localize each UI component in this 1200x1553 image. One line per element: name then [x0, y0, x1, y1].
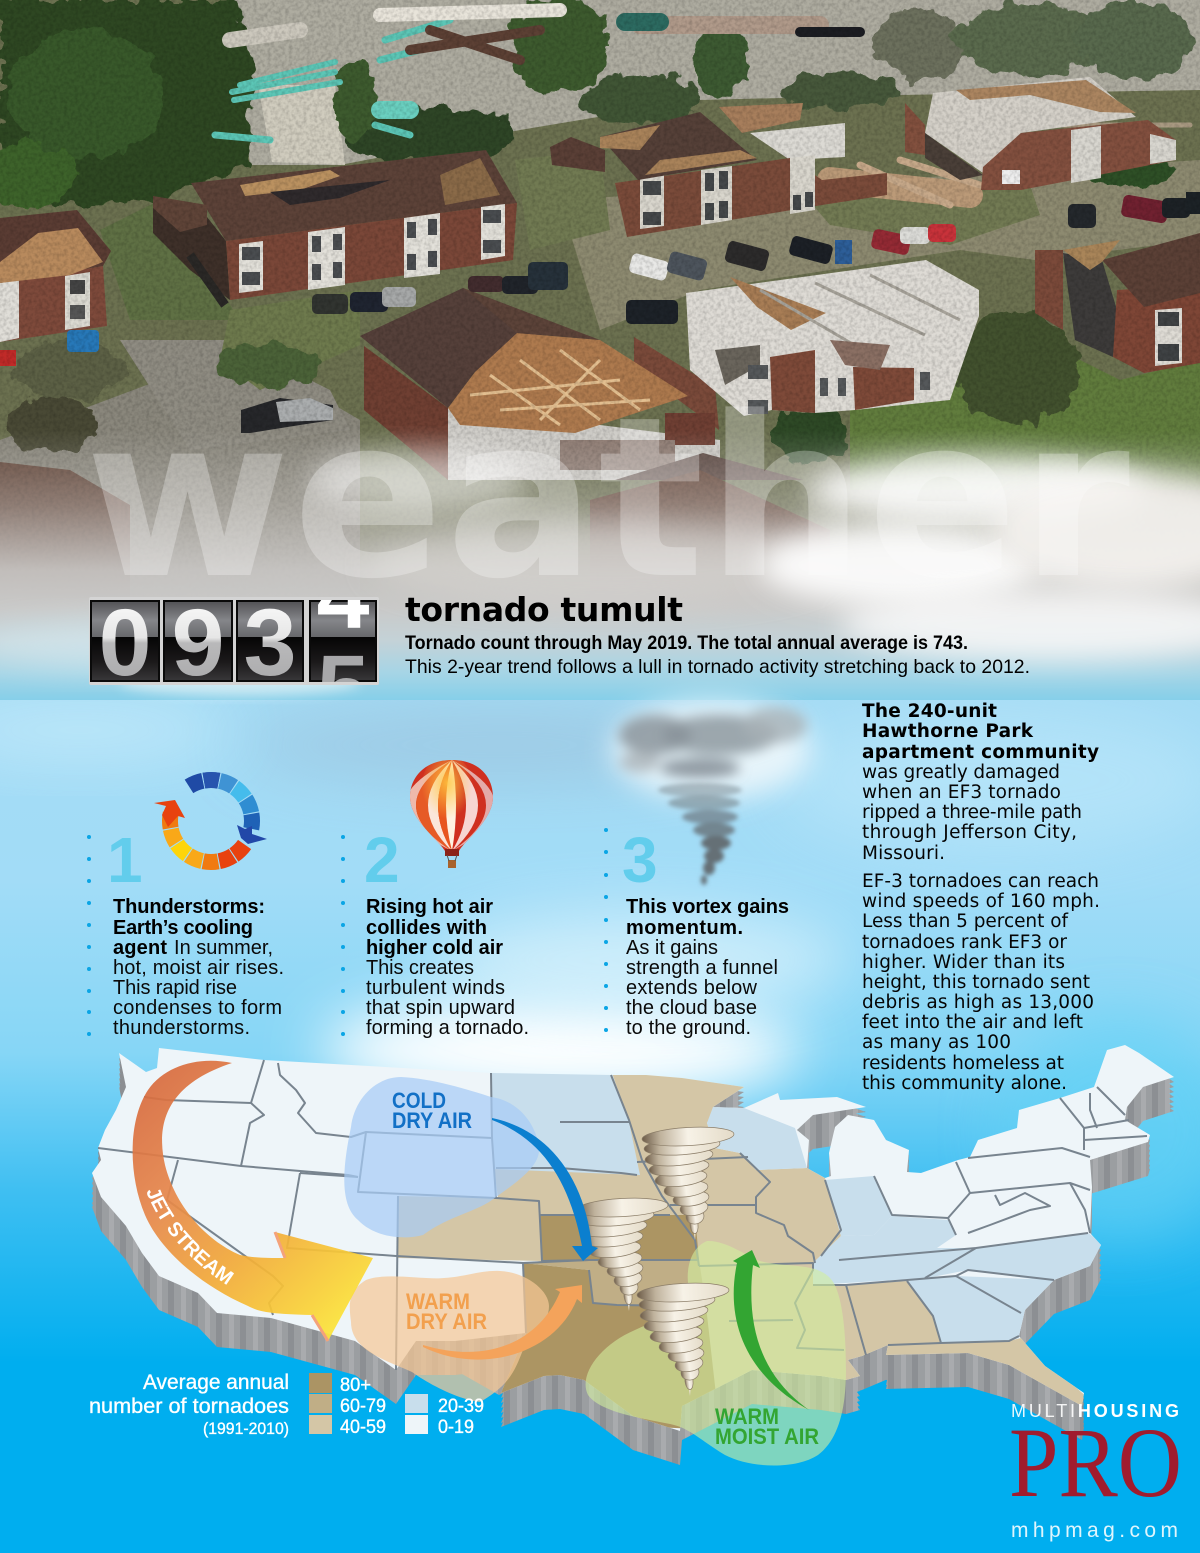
step 3 panel: [612, 700, 812, 1039]
legend values: 60-79: [340, 1396, 386, 1417]
counter digit rolling 4 to 5: [309, 600, 377, 682]
label: cold dry air: COLD: [392, 1088, 446, 1113]
logo url: mhpmag.com: [1011, 1519, 1178, 1542]
sidebar text: Hawthorne Park: was greatly damaged: [862, 762, 1060, 783]
step 2 panel: [364, 754, 529, 1039]
sidebar text: Hawthorne Park: tornadoes rank EF3 or: [862, 932, 1067, 953]
legend values: [340, 1375, 484, 1438]
step 3 text: to the ground.: [626, 1017, 751, 1039]
legend values: 40-59: [340, 1417, 386, 1438]
legend swatches: [309, 1373, 428, 1434]
step 1 text: In summer,: [174, 937, 273, 959]
dotted column rules: [87, 828, 608, 1036]
heading: tornado tumult: [405, 590, 683, 629]
state boundary lines: [98, 1060, 1147, 1370]
sidebar text: Hawthorne Park: EF-3 tornadoes can reach: [862, 871, 1099, 892]
arrow: jet stream: [132, 1060, 373, 1342]
arrow: warm air: [423, 1285, 582, 1360]
step 3 text: As it gains: [626, 937, 718, 959]
map base surface: [92, 1045, 1174, 1431]
sidebar text: Hawthorne Park: height, this tornado sent: [862, 972, 1090, 993]
step 3 text: the cloud base: [626, 997, 757, 1019]
label: warm moist air: [715, 1404, 819, 1449]
icon: circular temperature arrow: [154, 764, 268, 878]
building: left, torn roof: [0, 210, 111, 366]
step 1 text: thunderstorms.: [113, 1017, 250, 1039]
sidebar text: Hawthorne Park: feet into the air and left: [862, 1012, 1083, 1033]
step number 2: 2: [364, 824, 400, 896]
step 2 text: higher cold air: [366, 937, 503, 959]
publisher logo: [1009, 1401, 1182, 1542]
label: cold dry air: [392, 1088, 472, 1133]
step 1 text: [113, 896, 284, 1039]
step number 1: 1: [107, 824, 143, 896]
arrow: moist air: [733, 1250, 809, 1410]
building: centre right, open rooms: [634, 260, 979, 430]
pickup truck: [241, 398, 333, 433]
tornado icon: Iowa/Missouri: [642, 1125, 734, 1240]
cloud bank fading out the photo: [0, 430, 1200, 700]
sidebar text: Hawthorne Park: Less than 5 percent of: [862, 911, 1068, 932]
icon: funnel cloud: [612, 700, 812, 885]
step 2 text: [366, 896, 529, 1039]
building: right with roof: [1035, 233, 1200, 373]
label: warm dry air: DRY AIR: [406, 1309, 487, 1334]
label: warm moist air: WARM: [715, 1404, 779, 1429]
step 1 text: agent: [113, 937, 167, 959]
trees: [0, 0, 1195, 463]
step 3 text: strength a funnel: [626, 957, 778, 979]
label: cold dry air: DRY AIR: [392, 1108, 472, 1133]
building: top right gutted: [905, 77, 1176, 190]
step 3 text: [626, 896, 789, 1039]
tornado counter odometer: [89, 597, 379, 685]
sidebar text: Hawthorne Park: Missouri.: [862, 843, 945, 864]
subheading bold: Tornado count through May 2019. The total annual average is 743.: [405, 632, 968, 654]
step number 3: 3: [622, 824, 658, 896]
step 1 text: Thunderstorms:: [113, 896, 265, 918]
air mass: warm moist air: [586, 1241, 846, 1466]
counter digit rolling 4 to 5: 5: [317, 636, 369, 742]
teal and wood debris: [215, 10, 1190, 205]
sidebar text: Hawthorne Park: through Jefferson City,: [862, 822, 1077, 843]
logo word: PRO: PRO: [1009, 1407, 1182, 1518]
tornado icon: Arkansas/Louisiana: [637, 1281, 729, 1396]
sidebar text: Hawthorne Park: apartment community: [862, 742, 1099, 763]
step 1 text: This rapid rise: [113, 977, 237, 999]
arrow: cold air: [492, 1118, 598, 1261]
step 2 text: turbulent winds: [366, 977, 505, 999]
step 1 text: condenses to form: [113, 997, 282, 1019]
counter digit rolling 4 to 5: 4: [317, 543, 370, 649]
step 1 text: Earth’s cooling: [113, 917, 253, 939]
legend values: 20-39: [438, 1396, 484, 1417]
building: top middle: [550, 103, 887, 237]
step 2 text: Rising hot air: [366, 896, 493, 918]
step 1 text: hot, moist air rises.: [113, 957, 284, 979]
sidebar text: Hawthorne Park: ripped a three-mile path: [862, 802, 1082, 823]
step 3 text: momentum.: [626, 917, 743, 939]
sidebar text: Hawthorne Park: [862, 701, 1100, 1094]
sidebar text: Hawthorne Park: wind speeds of 160 mph.: [862, 891, 1100, 912]
counter digit 9: 9: [172, 590, 224, 696]
legend values: 80+: [340, 1375, 371, 1396]
map extruded walls: [92, 1050, 1174, 1465]
air mass: cold dry air: [344, 1077, 539, 1237]
sidebar text: Hawthorne Park: as many as 100: [862, 1032, 1011, 1053]
counter digit 3: 3: [244, 590, 296, 696]
label: warm dry air: [406, 1289, 487, 1334]
building: foreground collapsed roof: [0, 288, 830, 620]
sidebar text: Hawthorne Park: higher. Wider than its: [862, 952, 1065, 973]
step 3 text: This vortex gains: [626, 896, 789, 918]
ground: concrete, lawn and debris field: [0, 0, 1200, 620]
US tornado map: [92, 1045, 1174, 1466]
air mass: warm dry air: [350, 1271, 549, 1402]
legend title: number of tornadoes: [89, 1395, 289, 1418]
tornado icon: Kansas: [576, 1196, 668, 1311]
map legend: [89, 1371, 484, 1438]
icon: hot air balloon: [410, 760, 493, 868]
parked cars: [312, 192, 1200, 324]
sidebar text: Hawthorne Park: debris as high as 13,000: [862, 992, 1094, 1013]
label: warm moist air: MOIST AIR: [715, 1424, 819, 1449]
legend values: 0-19: [438, 1417, 474, 1438]
step 3 text: extends below: [626, 977, 758, 999]
building: centre left, patched roof: [153, 150, 517, 305]
sidebar text: Hawthorne Park: The 240-unit: [862, 701, 997, 722]
label: warm dry air: WARM: [406, 1289, 470, 1314]
step 2 text: collides with: [366, 917, 487, 939]
sidebar text: Hawthorne Park: this community alone.: [862, 1073, 1067, 1094]
hero photo: tornado-damaged apartment community: [0, 0, 1200, 620]
sky background: [0, 690, 1200, 1553]
sidebar text: Hawthorne Park: residents homeless at: [862, 1053, 1064, 1074]
step 2 text: forming a tornado.: [366, 1017, 529, 1039]
label: jet stream: JET STREAM: [147, 1190, 234, 1285]
step 1 panel: [107, 764, 284, 1039]
step 2 text: This creates: [366, 957, 474, 979]
sidebar text: Hawthorne Park: Hawthorne Park: [862, 721, 1034, 742]
counter digit 0: 0: [99, 590, 151, 696]
step 2 text: that spin upward: [366, 997, 515, 1019]
legend title: Average annual: [143, 1371, 289, 1394]
sidebar text: Hawthorne Park: when an EF3 tornado: [862, 782, 1061, 803]
logo line: Multihousing: MULTIHOUSING: [1011, 1401, 1179, 1421]
legend title: [89, 1371, 289, 1438]
map choropleth regions: [398, 1070, 1105, 1430]
watermark word: weather: weather: [85, 370, 1130, 628]
legend title: (1991-2010): [203, 1420, 289, 1438]
subheading regular: This 2-year trend follows a lull in tornado activity stretching back to 2012.: [405, 656, 1030, 678]
